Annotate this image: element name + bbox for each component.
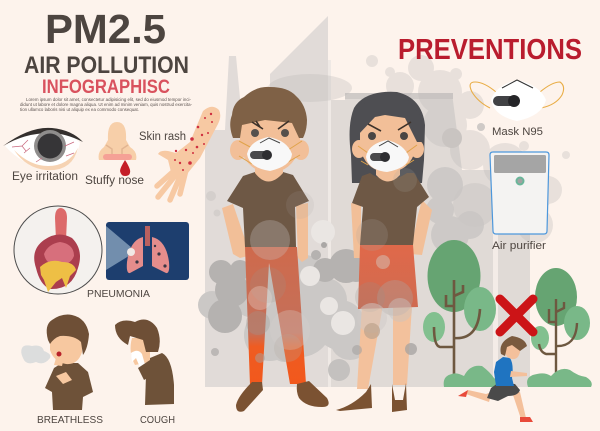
woman fringe <box>351 98 423 142</box>
icon: air purifier <box>490 152 549 234</box>
heading: preventions: PREVENTIONS <box>398 34 582 66</box>
woman neck and head <box>352 114 424 182</box>
man eyes and brows <box>251 121 289 137</box>
label: breathless: BREATHLESS <box>37 414 103 426</box>
man shoes <box>236 381 329 412</box>
woman eyes and brows <box>368 122 411 140</box>
smoke overlay in front of people <box>246 168 417 363</box>
icon: right trees <box>527 268 592 387</box>
heading: air pollution: AIR POLLUTION <box>24 52 189 79</box>
label: stuffy nose: Stuffy nose <box>85 175 144 187</box>
man shirt <box>227 172 309 247</box>
man trousers <box>245 247 306 385</box>
woman heels <box>336 383 407 412</box>
body text: lorem ipsum: tion ullamco laboris nisi ut aliquip ex ea commodo consequat. <box>20 107 139 112</box>
icon: breathless man <box>21 315 93 410</box>
woman shirt <box>352 173 429 245</box>
woman hair back <box>350 92 425 183</box>
body text: lorem ipsum: Lorem ipsum dolor sit amet, consectetur adipisicing elit, sed do eiusmod tempor inci- <box>26 97 191 102</box>
icon: alveoli in circle <box>14 206 102 294</box>
heading: infographisc: INFOGRAPHISC <box>42 77 170 98</box>
smoke clouds behind people <box>198 55 570 381</box>
icon: arm with rash <box>157 107 220 200</box>
woman arms <box>351 200 432 258</box>
label: eye irritation: Eye irritation <box>12 171 78 183</box>
body text: lorem ipsum <box>20 97 192 112</box>
icon: irritated eye <box>3 128 83 170</box>
man neck and head <box>230 110 309 182</box>
label: air purifier: Air purifier <box>492 240 546 252</box>
icon: nose with blood drop <box>99 122 136 176</box>
label: skin rash: Skin rash <box>139 131 186 143</box>
man hair <box>230 87 307 138</box>
woman mask <box>358 140 417 172</box>
title: PM2.5: PM2.5 <box>45 6 166 52</box>
icon: coughing man <box>115 320 174 405</box>
icon: red cross <box>500 299 533 332</box>
polluted city skyline background <box>205 16 530 387</box>
woman skirt <box>358 245 418 309</box>
woman legs <box>357 305 412 389</box>
label: cough: COUGH <box>140 414 175 426</box>
icon: lung x-ray panel <box>106 222 189 280</box>
label: mask N95: Mask N95 <box>492 126 543 138</box>
man arms <box>222 203 308 262</box>
body text: lorem ipsum: didunt ut labore et dolore magna aliqua. Ut enim ad minim veniam, quis nostrud exercita- <box>20 102 192 107</box>
icon: left trees <box>423 240 498 387</box>
label: pneumonia: PNEUMONIA <box>87 288 150 300</box>
icon: N95 mask <box>470 80 564 121</box>
man mask <box>239 137 302 171</box>
man with N95 mask <box>222 87 329 412</box>
icon: running man <box>458 336 533 422</box>
woman with N95 mask <box>336 92 432 412</box>
